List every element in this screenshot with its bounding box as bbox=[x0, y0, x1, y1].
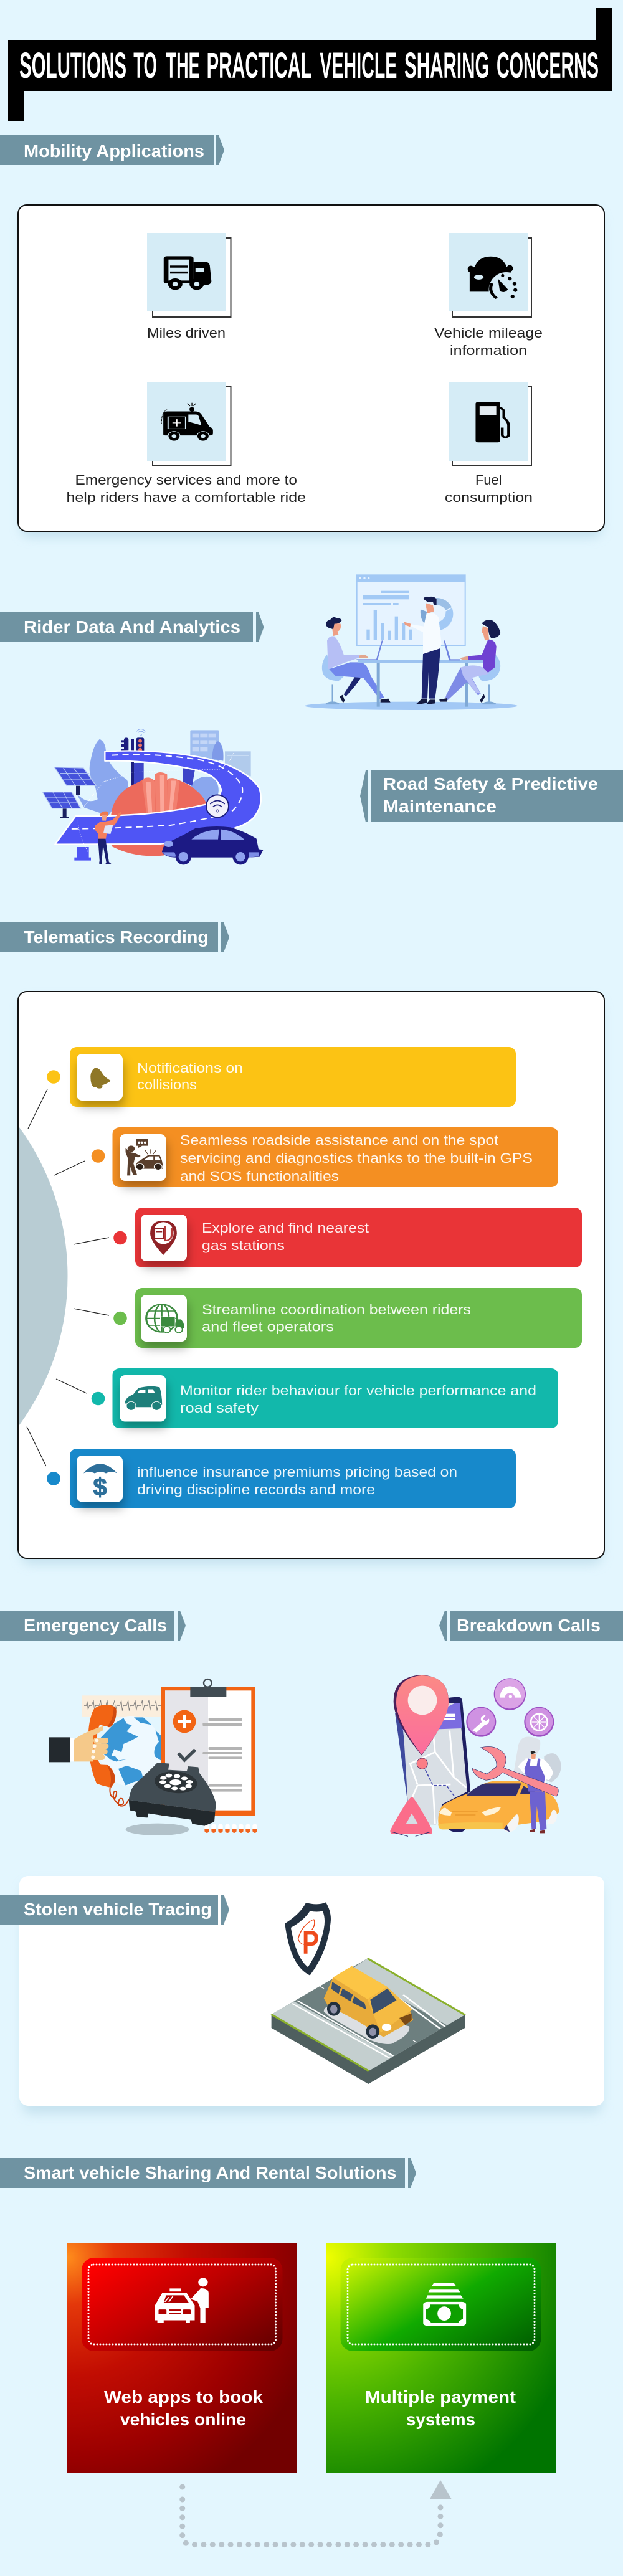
title banner: SOLUTIONS bbox=[19, 45, 126, 86]
heading: Stolen vehicle Tracing bbox=[0, 1895, 229, 1925]
item: collision notifications bbox=[28, 1047, 516, 1129]
tile: fuel consumption bbox=[445, 382, 533, 505]
icon: shield: P bbox=[302, 1925, 319, 1961]
tile: vehicle mileage: Vehicle mileage bbox=[434, 325, 543, 341]
icon: shield bbox=[285, 1902, 331, 1976]
tile: vehicle mileage bbox=[434, 233, 543, 358]
icon: umbrella and dollar: $ bbox=[93, 1474, 107, 1501]
item: collision notifications: collisions bbox=[137, 1077, 197, 1092]
icon: taxi and person bbox=[155, 2278, 209, 2323]
tile: fuel consumption: consumption bbox=[445, 490, 533, 505]
item: roadside assistance: Seamless roadside assistance and on the spot bbox=[180, 1132, 498, 1148]
card: web apps bbox=[67, 2243, 297, 2473]
tile: emergency services: help riders have a comfortable ride bbox=[66, 490, 306, 505]
tile: miles driven: Miles driven bbox=[147, 325, 226, 341]
icon: truck bbox=[164, 256, 211, 290]
title banner: TO bbox=[133, 45, 157, 86]
icon: car bbox=[125, 1386, 162, 1410]
title banner: VEHICLE bbox=[320, 45, 397, 86]
item: fleet coordination bbox=[74, 1288, 582, 1348]
heading: Breakdown Calls: Breakdown Calls bbox=[457, 1616, 601, 1635]
icon: ambulance bbox=[161, 403, 213, 441]
item: nearest gas stations: Explore and find nearest bbox=[202, 1220, 369, 1236]
card: payment systems: systems bbox=[406, 2410, 475, 2429]
card: payment systems: Multiple payment bbox=[365, 2387, 516, 2407]
item: nearest gas stations: gas stations bbox=[202, 1238, 285, 1253]
card: web apps: Web apps to book bbox=[104, 2387, 263, 2407]
title banner: SHARING bbox=[404, 45, 490, 86]
illustration: team analysing data bbox=[305, 574, 518, 710]
item: collision notifications: Notifications on bbox=[137, 1060, 243, 1076]
item: insurance premiums: influence insurance premiums pricing based on bbox=[137, 1464, 457, 1480]
item: fleet coordination: Streamline coordination between riders bbox=[202, 1302, 471, 1317]
heading: Road Safety and Predictive Maintenance: Road Safety & Predictive bbox=[383, 774, 598, 793]
heading: Rider Data And Analytics bbox=[0, 612, 264, 642]
heading: Mobility Applications: Mobility Applications bbox=[24, 141, 204, 161]
icon: person and damaged car bbox=[126, 1139, 163, 1175]
illustration: breakdown call bbox=[390, 1675, 561, 1836]
icon: fuel pump bbox=[475, 402, 508, 442]
hub: grey semicircle bbox=[19, 1127, 68, 1426]
item: rider behaviour: road safety bbox=[180, 1400, 259, 1416]
title banner: THE bbox=[166, 45, 200, 86]
tile: vehicle mileage: information bbox=[450, 343, 527, 358]
item: insurance premiums: driving discipline records and more bbox=[137, 1482, 375, 1497]
heading: Emergency Calls: Emergency Calls bbox=[24, 1616, 167, 1635]
heading: Road Safety and Predictive Maintenance: Maintenance bbox=[383, 797, 497, 816]
heading: Mobility Applications bbox=[0, 135, 224, 165]
arrow: dotted connector bbox=[179, 2480, 451, 2545]
icon: gas station pin bbox=[150, 1221, 177, 1255]
heading: Road Safety and Predictive Maintenance bbox=[360, 770, 623, 822]
tile: emergency services: Emergency services and more to bbox=[75, 472, 297, 488]
heading: Smart vehicle Sharing And Rental Solutions: Smart vehicle Sharing And Rental Solutions bbox=[24, 2163, 396, 2182]
heading: Rider Data And Analytics: Rider Data And Analytics bbox=[24, 617, 240, 637]
icon: banknotes bbox=[423, 2283, 466, 2326]
illustration: emergency call bbox=[49, 1679, 257, 1835]
heading: Smart vehicle Sharing And Rental Solutions bbox=[0, 2158, 416, 2188]
item: insurance premiums bbox=[27, 1427, 516, 1508]
illustration: road safety bbox=[42, 729, 264, 864]
item: roadside assistance: and SOS functionalities bbox=[180, 1168, 339, 1184]
tile: emergency services bbox=[66, 382, 306, 505]
tile: miles driven bbox=[147, 233, 231, 341]
item: nearest gas stations bbox=[74, 1208, 582, 1267]
item: rider behaviour: Monitor rider behaviour for vehicle performance and bbox=[180, 1383, 536, 1398]
heading: Stolen vehicle Tracing: Stolen vehicle Tracing bbox=[24, 1900, 212, 1919]
heading: Telematics Recording bbox=[0, 922, 229, 952]
icon: globe and truck bbox=[146, 1304, 184, 1333]
item: roadside assistance: servicing and diagnostics thanks to the built-in GPS bbox=[180, 1150, 533, 1166]
item: fleet coordination: and fleet operators bbox=[202, 1319, 334, 1334]
panel: stolen vehicle tracing bbox=[0, 1876, 604, 2114]
heading: Breakdown Calls bbox=[439, 1611, 623, 1641]
icon: bell bbox=[90, 1068, 111, 1089]
card: web apps: vehicles online bbox=[120, 2410, 246, 2429]
illustration: vehicle on road tile bbox=[272, 1958, 465, 2084]
title banner bbox=[8, 8, 612, 121]
heading: Emergency Calls bbox=[0, 1611, 186, 1641]
icon: umbrella and dollar bbox=[83, 1464, 117, 1501]
card: payment systems bbox=[326, 2243, 556, 2473]
panel: mobility applications bbox=[18, 205, 604, 537]
panel: telematics recording bbox=[18, 992, 604, 1564]
tile: fuel consumption: Fuel bbox=[475, 472, 502, 488]
heading: Telematics Recording: Telematics Recording bbox=[24, 927, 209, 947]
title banner: PRACTICAL bbox=[207, 45, 312, 86]
item: rider behaviour bbox=[56, 1368, 558, 1428]
item: roadside assistance bbox=[54, 1127, 558, 1187]
icon: car with gauge bbox=[468, 257, 524, 308]
